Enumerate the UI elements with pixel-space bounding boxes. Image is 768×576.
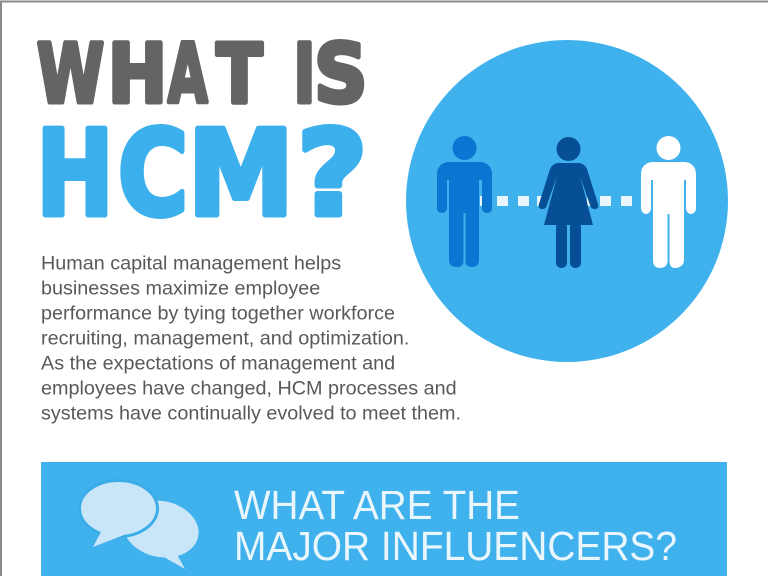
banner: major influencers bbox=[41, 462, 727, 576]
icon: speech bubbles bbox=[80, 480, 204, 569]
people circle graphic bbox=[406, 40, 728, 362]
intro text block: systems have continually evolved to meet them. bbox=[41, 402, 461, 424]
title: I bbox=[294, 26, 315, 122]
intro text block: employees have changed, HCM processes and bbox=[41, 378, 457, 400]
intro text block: performance by tying together workforce bbox=[41, 302, 395, 324]
title: A bbox=[168, 27, 208, 121]
title: T bbox=[216, 27, 263, 122]
intro text block: recruiting, management, and optimization. bbox=[41, 328, 409, 350]
icon: blue man bbox=[437, 136, 492, 267]
title: H bbox=[108, 27, 167, 121]
title: S bbox=[314, 28, 367, 122]
intro text block: businesses maximize employee bbox=[41, 278, 320, 300]
title: C bbox=[118, 106, 188, 243]
intro text block: As the expectations of management and bbox=[41, 352, 395, 374]
icon: white man bbox=[641, 136, 696, 268]
title: M bbox=[188, 106, 294, 243]
intro text block: Human capital management helps bbox=[41, 252, 341, 274]
title: H bbox=[36, 105, 114, 242]
dotted connectors bbox=[480, 196, 632, 206]
title bbox=[36, 26, 368, 243]
title: ? bbox=[297, 106, 368, 243]
banner heading: WHAT ARE THE bbox=[234, 482, 520, 528]
banner heading: MAJOR INFLUENCERS? bbox=[234, 523, 677, 569]
title: W bbox=[37, 27, 104, 121]
icon: navy woman bbox=[539, 137, 598, 268]
